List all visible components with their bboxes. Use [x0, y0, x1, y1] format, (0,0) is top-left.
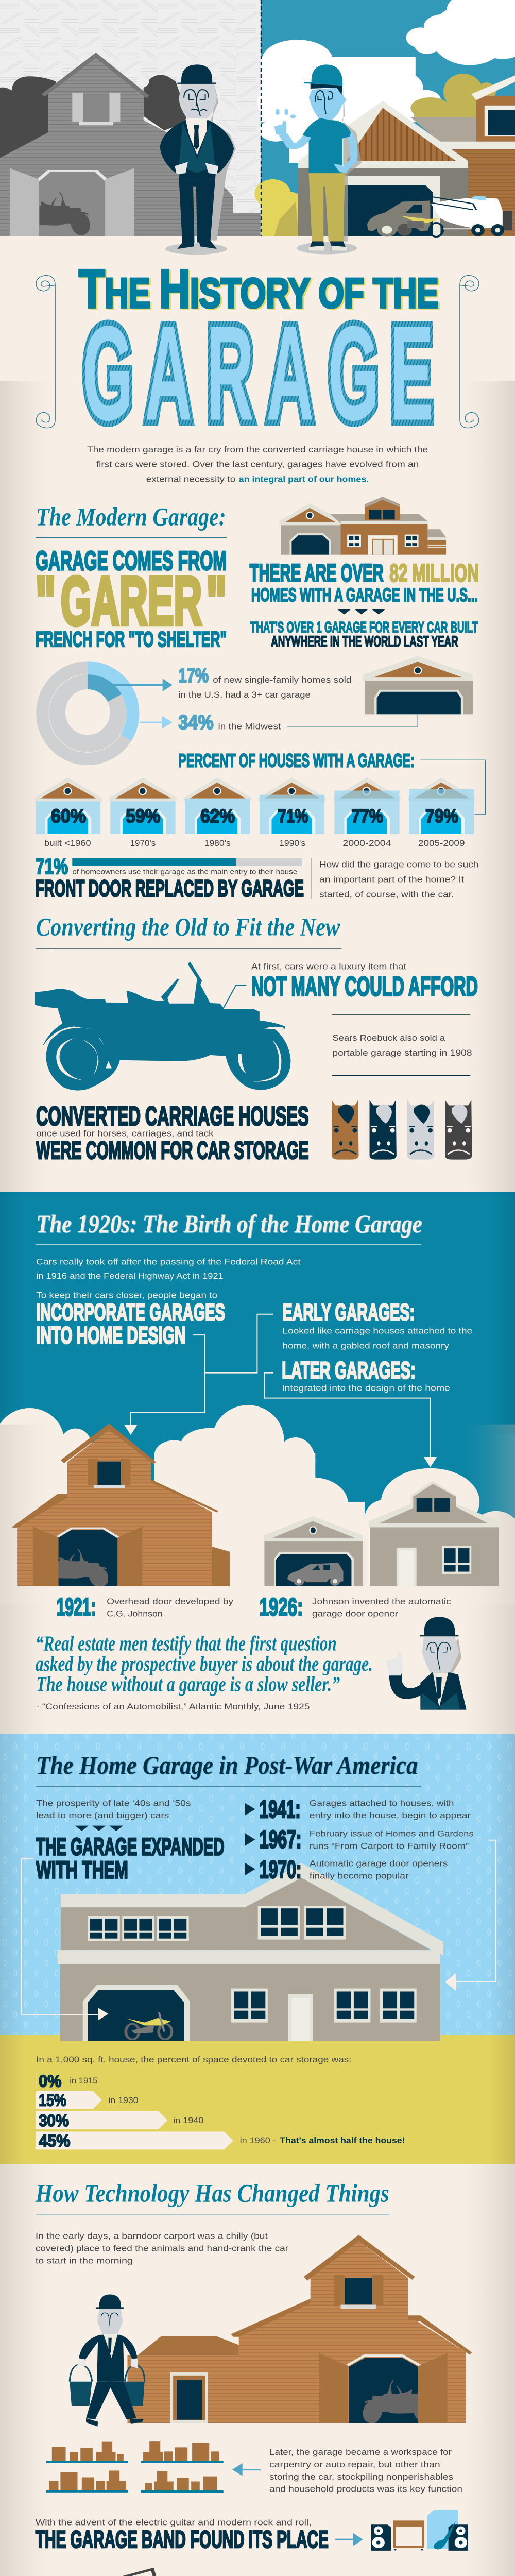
hero: modern colour side	[254, 0, 515, 236]
stat: front door replaced by garage	[36, 854, 304, 902]
panel: side vignette quote cream	[0, 1586, 515, 1734]
text: federal road act: in 1916 and the Federal Highway Act in 1921	[36, 1271, 224, 1281]
icon: band gear	[371, 2510, 468, 2551]
icon: stockpile shelves	[46, 2441, 224, 2493]
year 1926	[260, 1593, 451, 1621]
panel: side vignette upper cream	[0, 381, 515, 1192]
illustration: 1921 wooden barn garage	[11, 1423, 230, 1587]
panel: side shade blue and yellow bands	[0, 1734, 515, 2164]
section: title GARAGE and modern garage: "	[207, 563, 227, 639]
1970: 1970:	[260, 1855, 302, 1883]
chart labels: decades	[44, 838, 465, 848]
chart: car storage percentages	[36, 2072, 405, 2150]
icon: down triangles	[337, 609, 385, 615]
house: 1990s	[259, 777, 326, 834]
text: sears roebuck	[332, 1033, 472, 1058]
house: built before 1960	[35, 777, 102, 834]
bar 1915: 0%	[39, 2072, 61, 2091]
chart labels: decades: built <1960	[44, 838, 91, 848]
text: early days: covered) place to feed the animals and hand-crank the car	[36, 2244, 288, 2253]
house: 1980s: 62%	[200, 805, 235, 826]
stat: front door replaced by garage: of homeowners use their garage as the main entry to their house	[72, 868, 297, 876]
text: the garage expanded	[36, 1834, 225, 1884]
arrow: to house	[445, 1973, 496, 1991]
icon: down triangles	[75, 1826, 123, 1831]
house: 2005-2009	[408, 777, 475, 834]
year 1926: 1926:	[260, 1593, 303, 1621]
text: prosperity	[36, 1798, 191, 1820]
section: title GARAGE and modern garage	[36, 298, 479, 651]
callout: not many could afford	[224, 962, 478, 1008]
illustration: attached house	[369, 1481, 499, 1586]
bar 1930: 15%	[39, 2091, 66, 2110]
stat: converted carriage houses: once used for horses, carriages, and tack	[36, 1129, 214, 1138]
text: garage band	[36, 2518, 329, 2553]
text: later garages: Integrated into the design of the home	[282, 1383, 450, 1393]
year 1926: Johnson invented the automatic	[312, 1597, 451, 1606]
house: 1970s: 59%	[126, 805, 160, 826]
scroll ornament left	[36, 276, 55, 428]
section: title GARAGE and modern garage: FRENCH FOR "TO SHELTER"	[36, 627, 227, 651]
year 1921: C.G. Johnson	[107, 1609, 163, 1618]
text: workspace	[269, 2447, 462, 2494]
chart labels: decades: 2000-2004	[342, 838, 391, 848]
section: 1920s garages: INCORPORATE GARAGES	[36, 1299, 225, 1326]
house: 2005-2009: 79%	[425, 805, 458, 826]
text: later garages	[282, 1357, 450, 1393]
text: sears roebuck: Sears Roebuck also sold a	[332, 1033, 445, 1043]
quote	[36, 1632, 373, 1711]
arrow: to garage door	[21, 2008, 108, 2021]
text: how did the garage: an important part of the home? It	[319, 875, 465, 884]
stat: Garage comes from Garer	[36, 546, 227, 651]
stat: 34 percent: in the Midwest	[218, 722, 281, 731]
chart: percent of houses by decade	[35, 777, 475, 834]
1970: Automatic garage door openers	[310, 1859, 448, 1868]
house: 2000-2004	[333, 777, 401, 834]
stat: 17 percent: in the U.S. had a 3+ car garage	[178, 690, 311, 700]
bar 1915: in 1915	[70, 2076, 97, 2086]
bar 1915	[36, 2072, 97, 2091]
icon: modern house	[279, 497, 446, 555]
year 1926: garage door opener	[312, 1609, 399, 1618]
arrow: to later garage	[264, 1373, 437, 1467]
chart labels: decades: 1990's	[279, 838, 305, 848]
year 1921	[57, 1593, 234, 1621]
1941: 1941:	[260, 1795, 301, 1823]
house: built before 1960: 60%	[51, 805, 86, 826]
title word: Garage: GARAGE	[82, 298, 434, 448]
chart labels: decades: 1970's	[130, 838, 156, 848]
hero: dashed divider	[261, 0, 262, 236]
panel: post-war blue band	[0, 1734, 515, 2035]
text: early days: to start in the morning	[36, 2256, 133, 2265]
illustration: barn carport	[127, 2235, 472, 2424]
1970: finally become popular	[310, 1871, 409, 1880]
year 1921: 1921:	[57, 1593, 96, 1621]
stat: 17 percent	[178, 665, 351, 700]
icon: four sad horses	[332, 1100, 472, 1160]
section: space chart and technology	[35, 2055, 405, 2214]
icon: smartphone	[123, 2568, 168, 2576]
connector arrow left line	[21, 1858, 33, 2015]
stat: 17 percent: 17%	[178, 665, 209, 687]
1941: Garages attached to houses, with	[310, 1798, 454, 1808]
hero: old-time gray side	[0, 0, 261, 236]
stat: one garage per car	[250, 618, 478, 650]
section: barn, storage, band	[36, 2231, 472, 2553]
stat: 34 percent: 34%	[178, 711, 214, 734]
section: phone, couch, other uses	[36, 2568, 479, 2576]
text: space devoted: In a 1,000 sq. ft. house, the percent of space devoted to car storage was:	[36, 2055, 351, 2064]
bar 1940: 30%	[39, 2112, 69, 2130]
bar 1930: in 1930	[108, 2095, 139, 2105]
arrow: 34 percent	[140, 716, 173, 729]
arrow: 17 percent	[113, 679, 173, 691]
text: early garages	[283, 1299, 472, 1350]
character: man pointing up	[386, 1617, 467, 1710]
section: garage statistics	[35, 656, 486, 948]
panel: side vignette over clouds	[0, 1425, 515, 1604]
text: early garages: home, with a gabled roof and masonry	[283, 1341, 450, 1350]
house: 1970s	[109, 777, 177, 834]
text: the garage expanded: WITH THEM	[36, 1857, 128, 1884]
panel: side shade teal band	[0, 1192, 515, 1434]
1967: 1967:	[260, 1825, 302, 1853]
icon: dirt bike	[126, 2012, 172, 2039]
stat: 17 percent: of new single-family homes sold	[213, 675, 351, 685]
panel: side vignette lower cream	[0, 2164, 515, 2576]
stat: 82 million homes	[250, 559, 479, 605]
chart labels: decades: 2005-2009	[418, 838, 465, 848]
stat: converted carriage houses	[36, 1101, 309, 1164]
text: how did the garage: started, of course, with the car.	[319, 889, 454, 899]
scroll ornament right	[460, 276, 479, 428]
text: incorporate garages	[36, 1291, 225, 1349]
heading: The Modern Garage: The Modern Garage:	[36, 503, 226, 531]
character: modern man in cap	[274, 64, 362, 254]
illustration: post-war house	[21, 1863, 496, 2041]
quote: - “Confessions of an Automobilist,” Atlantic Monthly, June 1925	[36, 1702, 310, 1711]
text: federal road act: Cars really took off after the passing of the Federal Road Act	[36, 1257, 301, 1266]
arrow: to band	[335, 2533, 363, 2546]
section: title GARAGE and modern garage: GARER	[61, 563, 202, 639]
years timeline	[245, 1795, 474, 1883]
1941	[245, 1795, 471, 1823]
text: how did the garage	[319, 860, 478, 899]
section: quote and post-war: THE GARAGE EXPANDED	[36, 1834, 225, 1860]
stat: Garage comes from Garer: "	[36, 563, 56, 639]
bar 1930	[36, 2091, 139, 2110]
arrow: to early garage	[124, 1314, 273, 1435]
clouds	[0, 1405, 515, 1604]
stat: 34 percent	[178, 711, 281, 734]
hero illustration	[0, 0, 515, 428]
bar 1960: 45%	[39, 2132, 70, 2150]
text: prosperity: lead to more (and bigger) cars	[36, 1810, 169, 1820]
intro text	[87, 445, 428, 484]
text: federal road act	[36, 1257, 301, 1281]
connector arrow right line	[488, 1840, 496, 1982]
section: 1920s garages	[0, 1291, 515, 1621]
text: prosperity: The prosperity of late ‘40s and ‘50s	[36, 1798, 191, 1808]
text: garage band: With the advent of the electric guitar and modern rock and roll,	[36, 2518, 312, 2527]
callout: not many could afford: At first, cars were a luxury item that	[251, 962, 407, 971]
section: early cars and 1920s heading	[35, 961, 478, 1281]
icon: vintage car	[35, 961, 290, 1091]
panel: space-stat yellow band	[0, 2035, 515, 2164]
1967	[245, 1825, 474, 1853]
intro text: an integral part of our homes.	[239, 474, 369, 484]
panel: 1920s teal band	[0, 1192, 515, 1586]
stat: front door replaced by garage: 71%	[36, 854, 68, 879]
bar 1940: in 1940	[173, 2115, 203, 2125]
character: bowler-hat man	[160, 64, 236, 255]
chart labels: decades: 1980's	[204, 838, 231, 848]
arrow: to shelves	[232, 2463, 261, 2476]
bar 1960: That's almost half the house!	[280, 2136, 405, 2145]
text: incorporate garages: To keep their cars closer, people began to	[36, 1291, 217, 1300]
bar 1960: in 1960 -	[240, 2136, 276, 2145]
section: 1920s garages: INTO HOME DESIGN	[36, 1322, 185, 1349]
year 1921: Overhead door developed by	[107, 1597, 234, 1606]
bar 1960	[36, 2132, 405, 2150]
section: quote and post-war	[21, 1617, 496, 2041]
house: 1990s: 71%	[278, 805, 308, 826]
text: early days	[36, 2231, 288, 2265]
house: 2000-2004: 77%	[351, 805, 383, 826]
character: man with buckets	[70, 2294, 145, 2427]
text: early days: In the early days, a barndoor carport was a chilly (but	[36, 2231, 268, 2241]
donut chart	[36, 661, 139, 765]
illustration: 1926 modern garage	[264, 1516, 363, 1586]
icon: three-car garage	[363, 656, 473, 714]
bar 1940	[36, 2111, 203, 2130]
panel: post-war dots texture	[0, 1734, 515, 2164]
intro text: external necessity to	[146, 474, 235, 484]
text: workspace: carpentry or auto repair, but other than	[269, 2460, 440, 2469]
1970	[245, 1855, 448, 1883]
house: 1980s	[184, 777, 251, 834]
